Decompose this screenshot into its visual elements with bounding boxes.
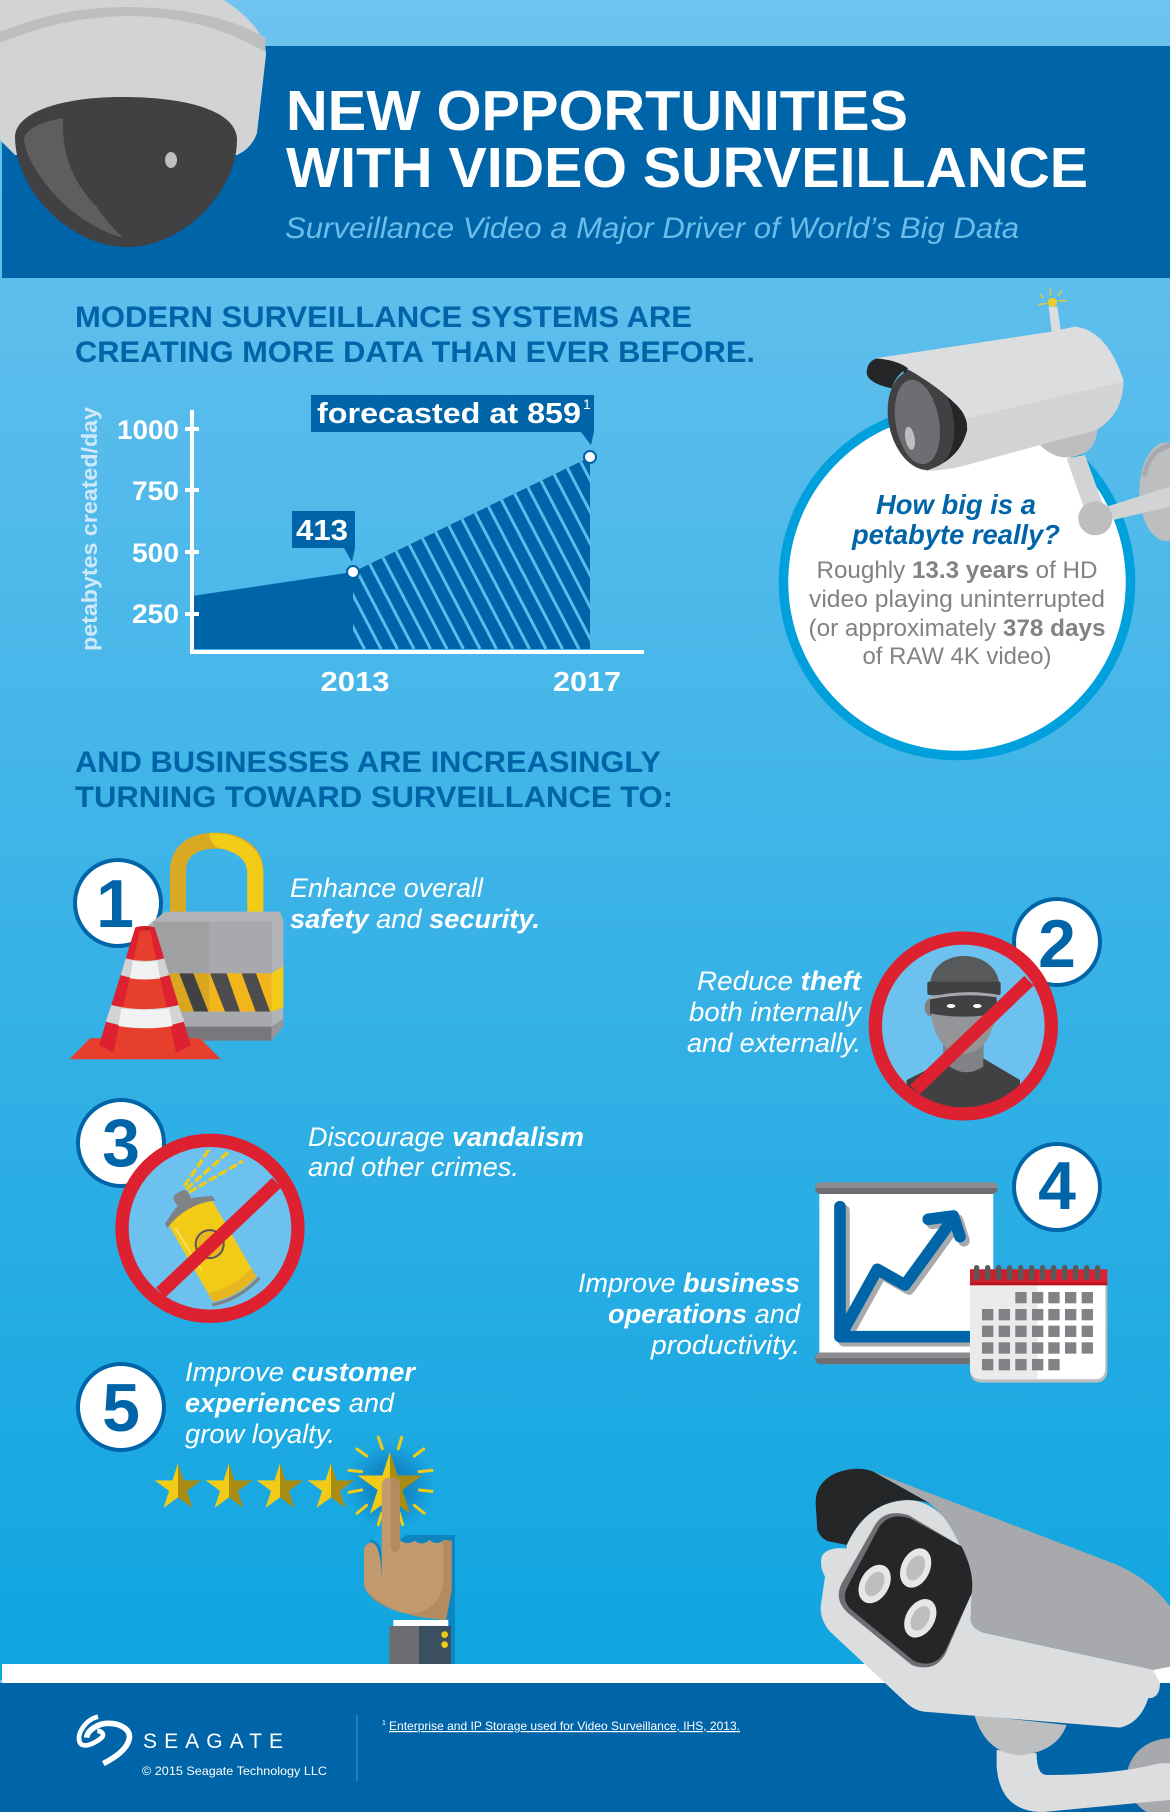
icon: thief with prohibition sign — [875, 938, 1051, 1120]
calendar — [970, 1283, 1107, 1383]
panel: how big is a petabyte — [784, 408, 1130, 756]
icon: pointing hand — [364, 1477, 455, 1664]
callout: forecasted at 859 — [311, 395, 594, 445]
callout: forecasted at 859: 1 — [583, 396, 591, 412]
y-axis title: petabytes created/day — [77, 406, 102, 651]
axes — [185, 410, 644, 652]
text 3: Discourage vandalism — [308, 1122, 584, 1152]
icon: traffic cone — [69, 926, 221, 1059]
footnote: 1 — [382, 1720, 386, 1727]
text 2: and externally. — [687, 1028, 861, 1058]
text 4: operations and — [608, 1299, 801, 1329]
hatched area forecast — [353, 460, 590, 649]
text 4: productivity. — [650, 1330, 800, 1360]
icon: padlock — [148, 833, 283, 1041]
solid area 2013 — [192, 572, 353, 649]
y-axis labels: 1000 — [117, 415, 179, 445]
icon: rating stars — [155, 1437, 434, 1530]
number badge 4: 4 — [1038, 1148, 1076, 1224]
heading: businesses: AND BUSINESSES ARE INCREASINGLY — [75, 746, 661, 779]
text 4 — [578, 1268, 801, 1360]
answer: (or approximately 378 days — [808, 615, 1106, 642]
number badge 2 — [1014, 899, 1100, 985]
x-axis labels: 2013 — [320, 666, 390, 697]
circle — [784, 408, 1130, 756]
y-axis labels: 250 — [132, 599, 179, 629]
text 2: Reduce theft — [697, 966, 862, 996]
heading: businesses — [75, 746, 673, 814]
item 2: reduce theft — [687, 899, 1100, 1120]
number badge 2: 2 — [1038, 906, 1076, 982]
logo: Seagate: SEAGATE — [143, 1730, 283, 1753]
title — [286, 79, 1088, 200]
text 1: Enhance overall — [290, 873, 484, 903]
subtitle: Surveillance Video a Major Driver of World’s Big Data — [285, 212, 1019, 245]
number badge 5 — [78, 1364, 164, 1450]
text 1 — [290, 873, 540, 934]
item 4: business operations — [578, 1144, 1107, 1383]
title: NEW OPPORTUNITIES — [286, 79, 908, 143]
logo: Seagate — [79, 1717, 283, 1764]
text 2 — [687, 966, 863, 1058]
data points — [347, 451, 596, 578]
number badge 5: 5 — [102, 1370, 140, 1446]
callout: 413: 413 — [296, 515, 348, 547]
footnote: Enterprise and IP Storage used for Video Surveillance, IHS, 2013. — [389, 1719, 740, 1733]
text 1: safety and security. — [290, 904, 540, 934]
heading: businesses: TURNING TOWARD SURVEILLANCE TO: — [75, 781, 673, 814]
footer band — [0, 1683, 1170, 1812]
number badge 3: 3 — [102, 1105, 140, 1181]
number badge 1: 1 — [96, 866, 134, 942]
answer: video playing uninterrupted — [809, 586, 1105, 613]
icon: presentation board and calendar — [815, 1182, 1107, 1383]
number badge 1 — [75, 860, 161, 946]
item 1: safety and security — [69, 833, 540, 1059]
item 5: customer experiences — [78, 1357, 455, 1664]
header band — [2, 46, 1170, 278]
text 5: grow loyalty. — [185, 1419, 335, 1449]
text 5 — [185, 1357, 417, 1449]
text 3: and other crimes. — [308, 1152, 519, 1182]
x-axis labels: 2017 — [553, 666, 621, 697]
icon: bullet camera — [867, 288, 1170, 541]
text 2: both internally — [689, 997, 863, 1027]
number badge 3 — [78, 1100, 164, 1186]
text 5: experiences and — [185, 1388, 395, 1418]
number badge 4 — [1014, 1144, 1100, 1230]
y-axis labels — [117, 415, 179, 629]
title: WITH VIDEO SURVEILLANCE — [286, 136, 1088, 200]
x-axis labels — [320, 666, 621, 697]
question — [851, 489, 1060, 550]
question: How big is a — [876, 489, 1036, 520]
heading: modern surveillance: CREATING MORE DATA THAN EVER BEFORE. — [75, 336, 755, 369]
text 3 — [308, 1122, 584, 1182]
icon: large bullet camera — [816, 1469, 1170, 1812]
y-axis labels: 750 — [132, 476, 179, 506]
answer — [808, 557, 1106, 670]
icon: dome camera — [0, 0, 266, 247]
callout: 413 — [292, 511, 355, 562]
white strip — [2, 1664, 1170, 1683]
text 4: Improve business — [578, 1268, 800, 1298]
y-axis labels: 500 — [132, 538, 179, 568]
question: petabyte really? — [851, 519, 1060, 550]
icon: spray can with prohibition sign — [122, 1140, 298, 1316]
text 5: Improve customer — [185, 1357, 417, 1387]
copyright: © 2015 Seagate Technology LLC — [142, 1764, 327, 1778]
answer: Roughly 13.3 years of HD — [816, 557, 1098, 584]
lens — [879, 364, 967, 476]
callout: forecasted at 859: forecasted at 859 — [317, 398, 581, 430]
item 3: discourage vandalism — [78, 1100, 584, 1316]
area chart: petabytes created per day — [81, 395, 644, 692]
heading: modern surveillance: MODERN SURVEILLANCE SYSTEMS ARE — [75, 301, 692, 334]
heading: modern surveillance — [75, 301, 755, 369]
answer: of RAW 4K video) — [862, 643, 1052, 670]
